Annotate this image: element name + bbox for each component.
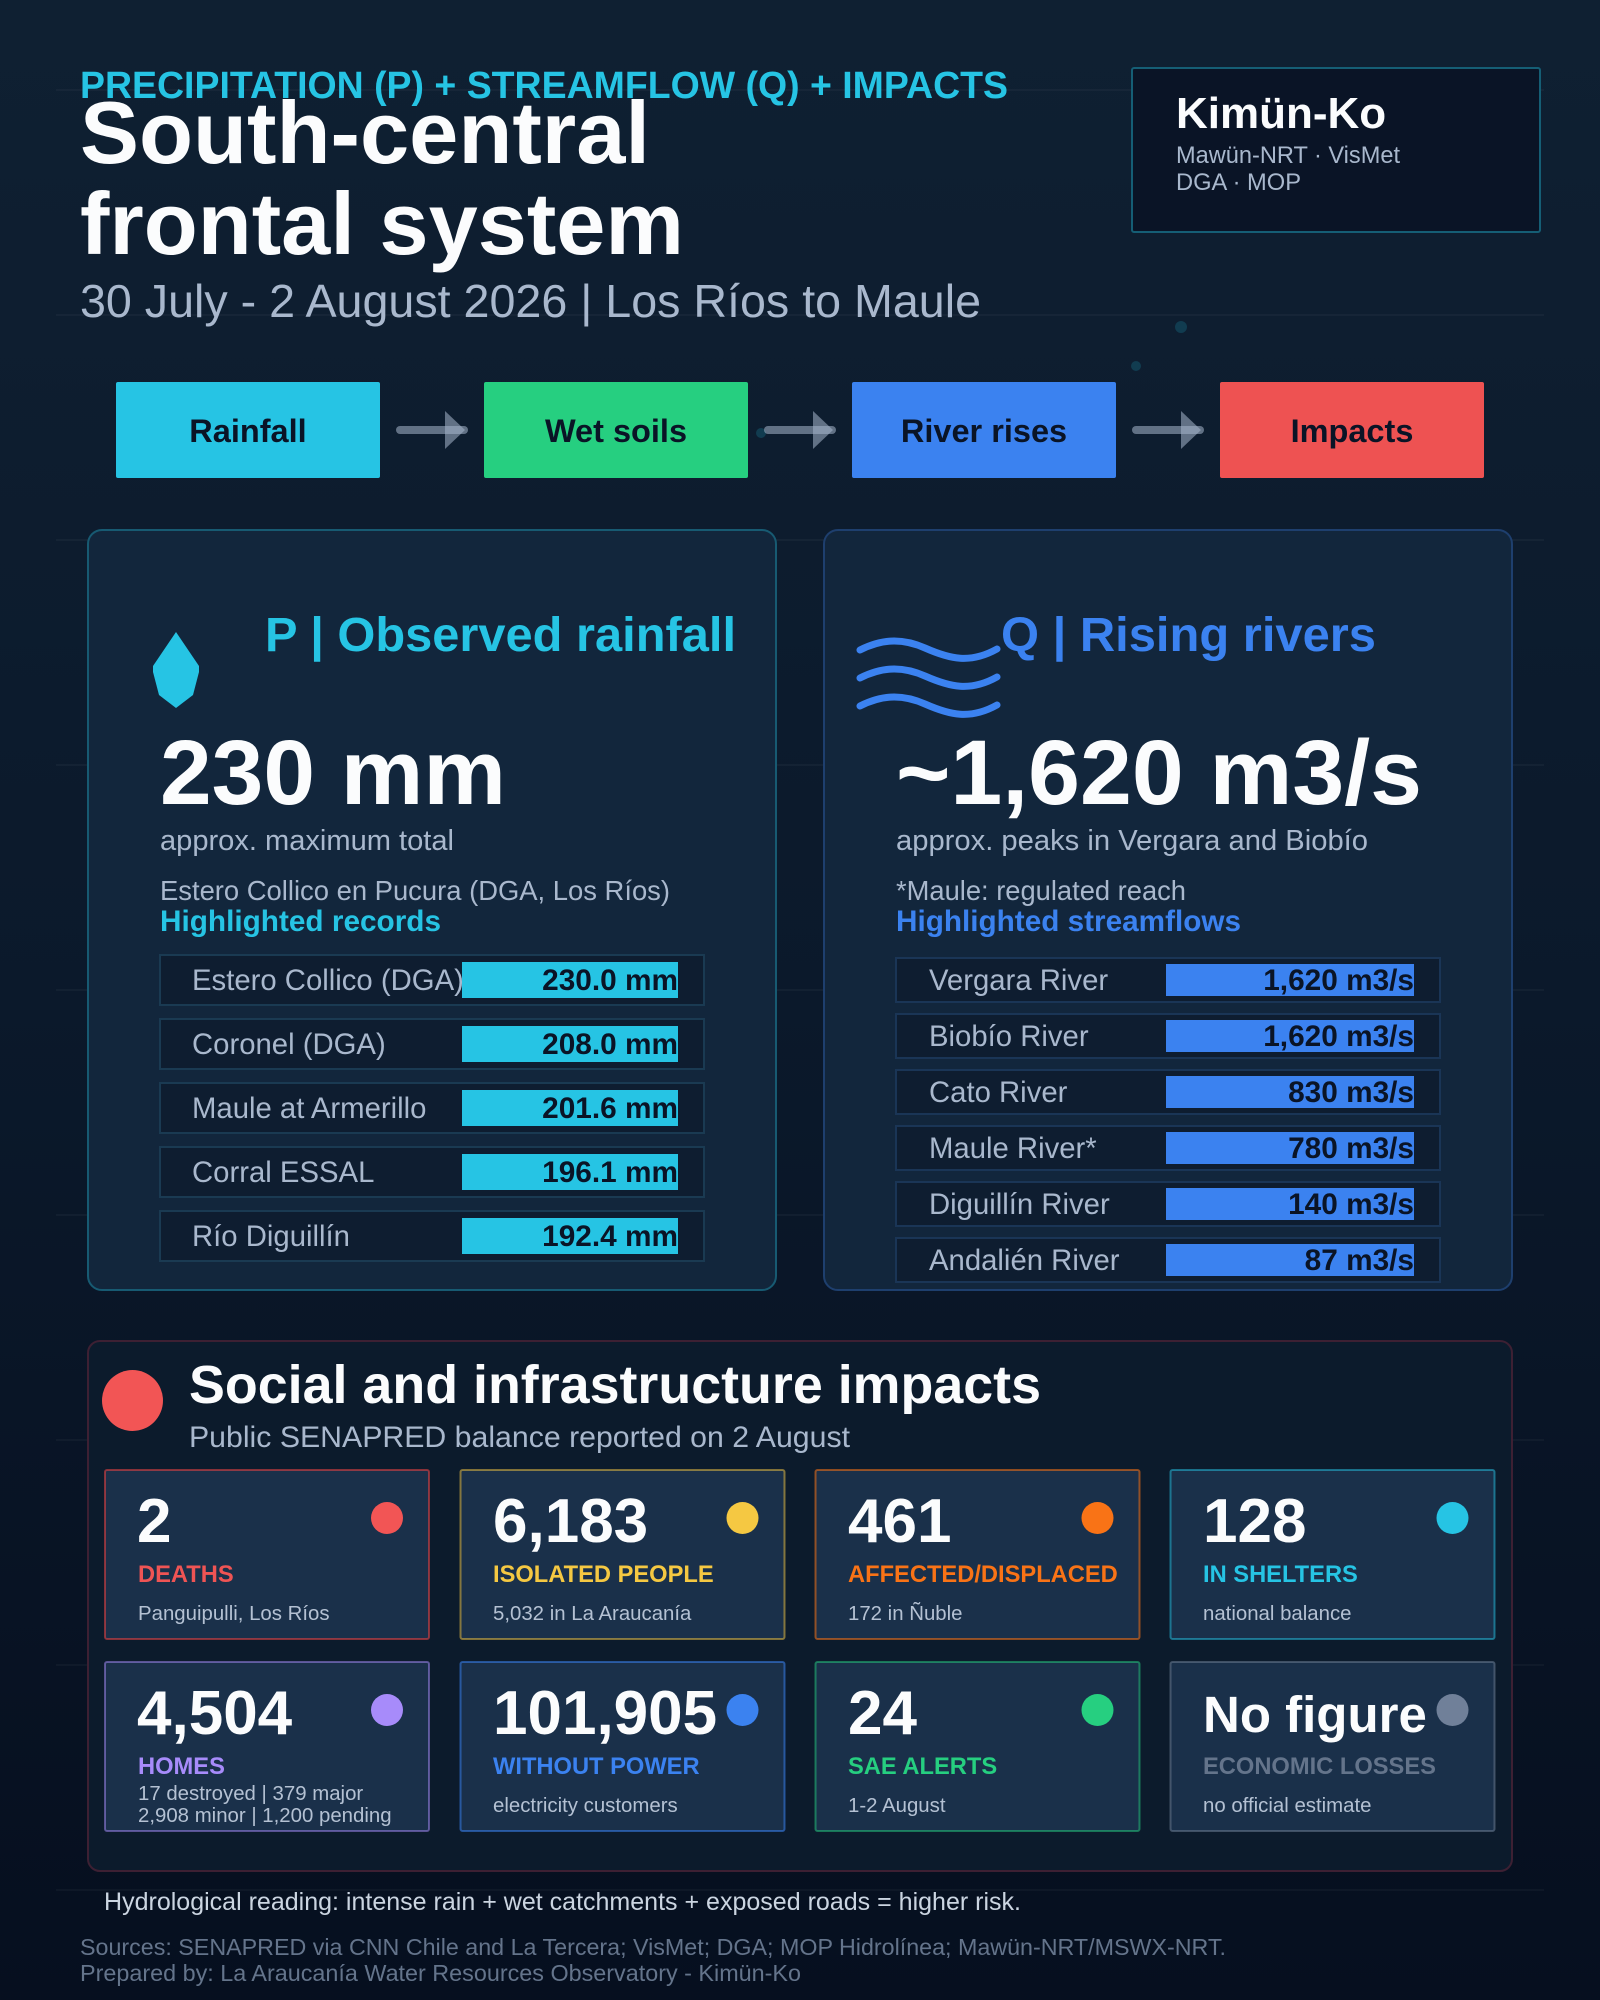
bar list: records: 230.0 mm [542,964,678,997]
card: without power: electricity customers [493,1795,678,1817]
step: wet soils: Wet soils [545,413,687,449]
card: affected/displaced: 172 in Ñuble [848,1601,962,1625]
card: SAE alerts: 24 [848,1679,917,1748]
card: economic losses: no official estimate [1203,1795,1372,1817]
bar list: records: 196.1 mm [542,1156,678,1189]
arrow [1136,411,1201,449]
card: homes: 2,908 minor | 1,200 pending [138,1805,392,1827]
card: isolated people: ISOLATED PEOPLE [493,1562,714,1588]
bar list: streamflows: 1,620 m3/s [1263,964,1414,997]
step: rainfall: Rainfall [189,413,307,449]
card: deaths: Panguipulli, Los Ríos [138,1603,330,1625]
big number: 230 mm [160,722,506,824]
subheading: Highlighted records [160,905,441,938]
step: impacts [1220,382,1484,478]
card: SAE alerts: 1-2 August [848,1795,946,1817]
card: in shelters [1170,1470,1494,1639]
subheading: Highlighted streamflows [896,905,1241,938]
panel heading: Q | Rising rivers [1001,609,1376,662]
card: SAE alerts [816,1662,1140,1831]
step: rainfall [116,382,380,478]
card: deaths: DEATHS [138,1562,234,1588]
icon: red circle [102,1370,163,1431]
card: in shelters: IN SHELTERS [1203,1562,1358,1588]
card: economic losses: ECONOMIC LOSSES [1203,1754,1436,1780]
bar list: records: Corral ESSAL [192,1156,374,1189]
card: economic losses: No figure [1203,1686,1427,1743]
card: affected/displaced: AFFECTED/DISPLACED [848,1562,1118,1588]
sources [80,1934,1226,1986]
bar list: streamflows [896,958,1440,1282]
sources: Sources: SENAPRED via CNN Chile and La Tercera; VisMet; DGA; MOP Hidrolínea; Mawün-NRT/MSWX-NRT. [80,1934,1226,1960]
flow: process chain [116,382,1484,478]
eyebrow heading: PRECIPITATION (P) + STREAMFLOW (Q) + IMPACTS [80,65,1008,107]
description [896,825,1368,906]
bar list: records: Estero Collico (DGA) [192,964,464,997]
step: river rises [852,382,1116,478]
card: affected/displaced [816,1470,1140,1639]
title: South-central [80,83,650,182]
card: affected/displaced: 461 [848,1487,951,1556]
card: in shelters: 128 [1203,1487,1306,1556]
bar list: streamflows: Cato River [929,1076,1068,1109]
panel heading: P | Observed rainfall [265,609,736,662]
bar list: records: 201.6 mm [542,1092,678,1125]
bar list: streamflows: 87 m3/s [1305,1244,1414,1277]
bar list: streamflows: 830 m3/s [1288,1076,1414,1109]
card: homes [105,1662,429,1831]
card: without power [460,1662,784,1831]
brand box: DGA · MOP [1176,169,1301,196]
card: without power: WITHOUT POWER [493,1754,700,1780]
description [160,825,670,906]
card: homes: HOMES [138,1754,225,1780]
description: *Maule: regulated reach [896,875,1186,906]
bar list: streamflows: Andalién River [929,1244,1120,1277]
big number: ~1,620 m3/s [896,722,1422,824]
hydrological reading note: Hydrological reading: intense rain + wet catchments + exposed roads = higher risk. [104,1888,1021,1916]
step: wet soils [484,382,748,478]
icon: water waves [860,641,997,714]
bar list: streamflows: 780 m3/s [1288,1132,1414,1165]
card: homes: 17 destroyed | 379 major [138,1783,363,1805]
subtitle: 30 July - 2 August 2026 | Los Ríos to Maule [80,275,981,327]
card: in shelters: national balance [1203,1603,1352,1625]
title: frontal system [80,174,684,273]
card: homes: 4,504 [137,1679,293,1748]
card: isolated people: 5,032 in La Araucanía [493,1603,692,1625]
bar list: streamflows: 140 m3/s [1288,1188,1414,1221]
brand box: Mawün-NRT · VisMet [1176,142,1400,169]
description: approx. peaks in Vergara and Biobío [896,825,1368,857]
panel subtitle: Public SENAPRED balance reported on 2 August [189,1421,851,1454]
bar list: streamflows: 1,620 m3/s [1263,1020,1414,1053]
bar list: records: Maule at Armerillo [192,1092,426,1125]
description: approx. maximum total [160,825,454,857]
brand box [1132,68,1540,232]
card: deaths [105,1470,429,1639]
card: SAE alerts: SAE ALERTS [848,1754,997,1780]
bar list: records [160,955,704,1261]
bar list: records: 208.0 mm [542,1028,678,1061]
sources: Prepared by: La Araucanía Water Resources Observatory - Kimün-Ko [80,1960,801,1986]
bar list: records: Coronel (DGA) [192,1028,386,1061]
brand box: Kimün-Ko [1176,89,1386,138]
panel heading: Social and infrastructure impacts [189,1355,1041,1415]
bar list: streamflows: Diguillín River [929,1188,1110,1221]
card: economic losses [1170,1662,1494,1831]
arrow [768,411,833,449]
step: impacts: Impacts [1291,413,1413,449]
bar list: records: Río Diguillín [192,1220,350,1253]
bar list: streamflows: Biobío River [929,1020,1089,1053]
card: isolated people: 6,183 [493,1487,648,1556]
bar list: streamflows: Vergara River [929,964,1108,997]
bar list: records: 192.4 mm [542,1220,678,1253]
arrow [400,411,465,449]
panel: social and infrastructure impacts [88,1341,1512,1871]
bar list: streamflows: Maule River* [929,1132,1097,1165]
card: without power: 101,905 [493,1679,717,1748]
step: river rises: River rises [901,413,1067,449]
panel: observed rainfall [88,530,776,1290]
card: deaths: 2 [137,1487,171,1556]
title [80,83,684,273]
icon: water drop [153,632,199,708]
panel: rising rivers [824,530,1512,1290]
card: isolated people [460,1470,784,1639]
description: Estero Collico en Pucura (DGA, Los Ríos) [160,875,670,906]
